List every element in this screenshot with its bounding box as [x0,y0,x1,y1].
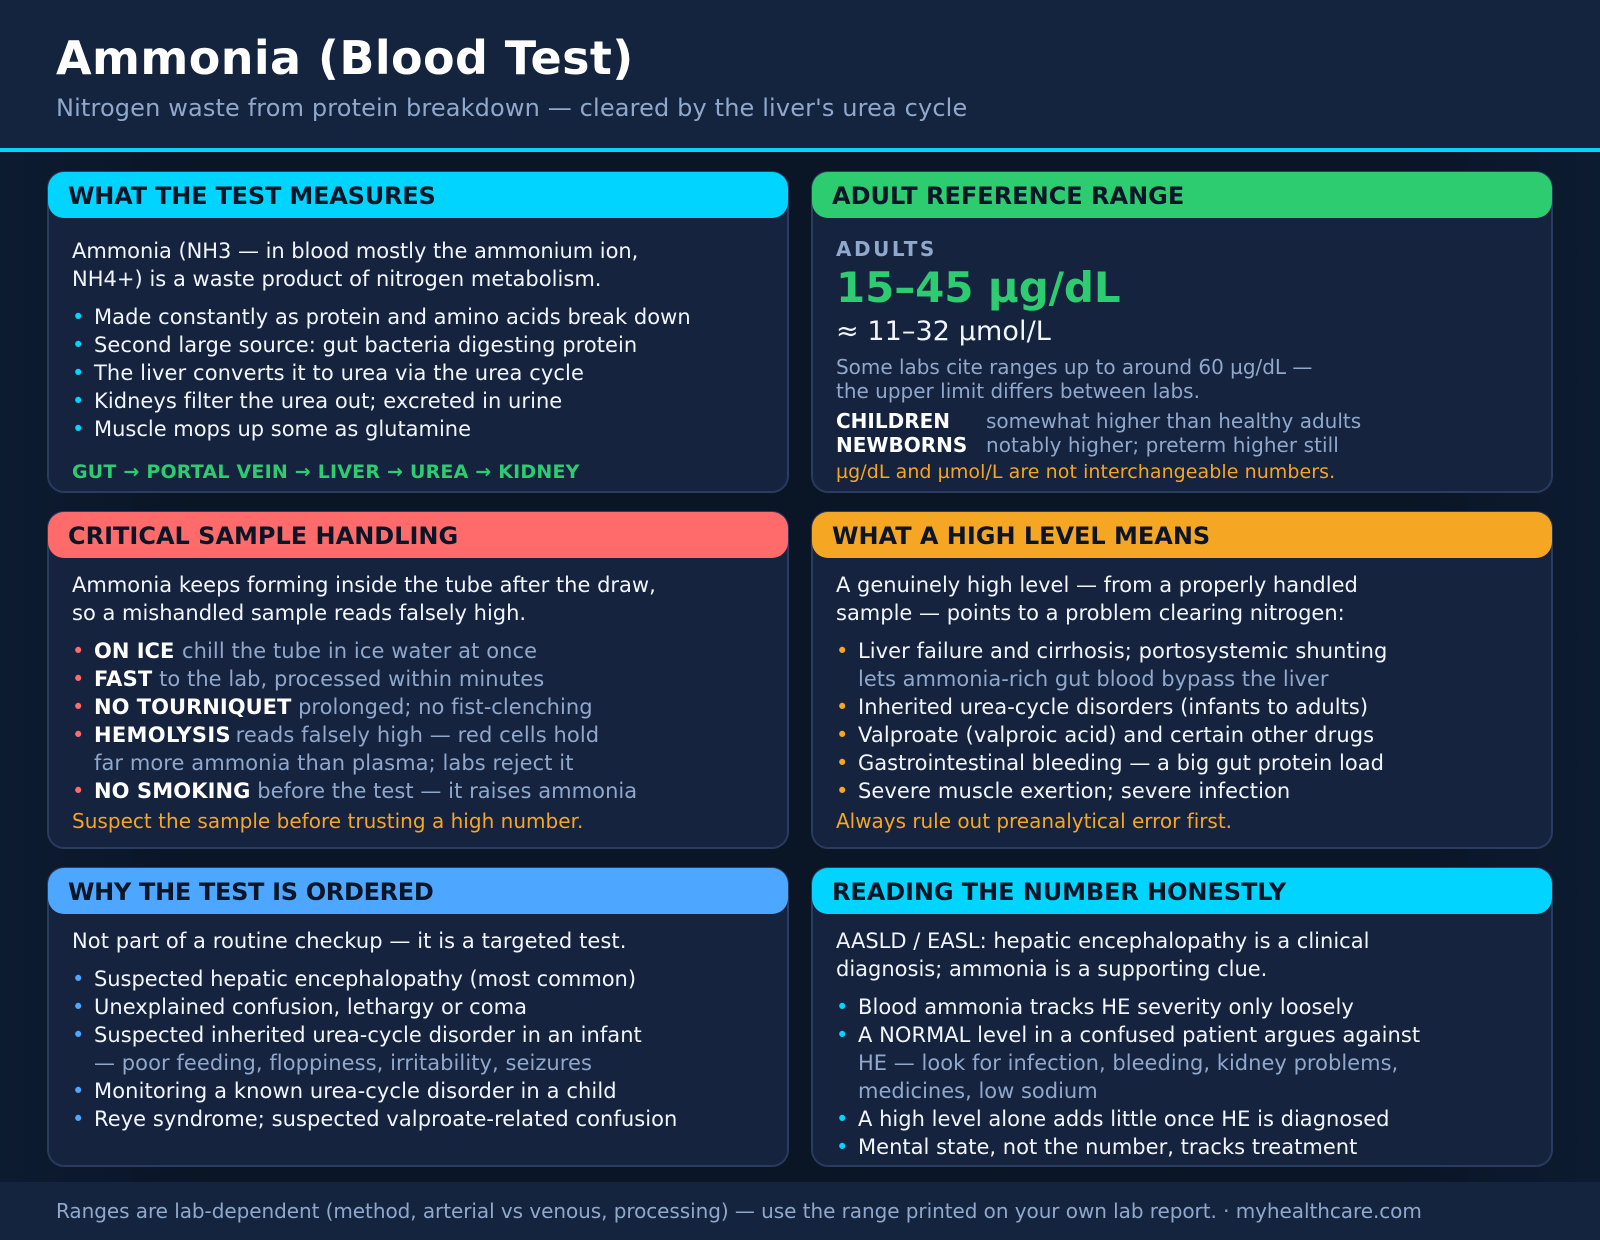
handling list: • [72,639,84,663]
interpretation list: A NORMAL level in a confused patient argues against [858,1023,1420,1047]
children row: somewhat higher than healthy adults [986,409,1361,433]
handling list: far more ammonia than plasma; labs reject it [94,751,574,775]
reasons list: • [72,995,84,1019]
bullet list: Kidneys filter the urea out; excreted in urine [94,389,562,413]
interpretation list: • [836,995,848,1019]
intro text: Ammonia (NH3 — in blood mostly the ammonium ion, [72,239,638,263]
intro text: Ammonia keeps forming inside the tube after the draw, [72,573,656,597]
intro text [836,573,1358,625]
causes list: Inherited urea-cycle disorders (infants to adults) [858,695,1368,719]
bullet list [72,305,691,441]
heading: reading the number honestly [812,868,1552,914]
handling list: NO TOURNIQUET prolonged; no fist-clenching [94,695,593,719]
heading: why the test is ordered [48,868,788,914]
heading: what the test measures: WHAT THE TEST MEASURES [68,182,436,210]
reasons list: • [72,1079,84,1103]
interpretation list: • [836,1135,848,1159]
causes list [836,639,1387,803]
adult range value: 15–45 µg/dL [836,263,1121,312]
handling list: HEMOLYSIS reads falsely high — red cells hold [94,723,599,747]
footer: Ranges are lab-dependent (method, arterial vs venous, processing) — use the range printed on your own lab report. · myhealthcare.com [56,1199,1422,1223]
children row: CHILDREN [836,409,950,433]
causes list: Liver failure and cirrhosis; portosystemic shunting [858,639,1387,663]
bullet list: • [72,389,84,413]
bullet list: Muscle mops up some as glutamine [94,417,471,441]
reasons list: • [72,967,84,991]
footer [0,1182,1600,1240]
bullet list: Made constantly as protein and amino acids break down [94,305,691,329]
intro text [72,239,638,291]
handling list: • [72,779,84,803]
intro text [72,573,656,625]
interpretation list: Blood ammonia tracks HE severity only loosely [858,995,1354,1019]
reasons list: Suspected hepatic encephalopathy (most common) [94,967,636,991]
subtitle: Nitrogen waste from protein breakdown — cleared by the liver's urea cycle [56,94,967,122]
header banner [0,0,1600,152]
interpretation list: medicines, low sodium [858,1079,1098,1103]
warning note: Suspect the sample before trusting a high number. [72,809,583,833]
panel: critical sample handling [48,512,788,848]
heading: adult reference range [812,172,1552,218]
reasons list: • [72,1023,84,1047]
interpretation list: HE — look for infection, bleeding, kidney problems, [858,1051,1398,1075]
lab note: the upper limit differs between labs. [836,379,1200,403]
causes list: • [836,639,848,663]
bullet list: Second large source: gut bacteria digesting protein [94,333,637,357]
reasons list: Suspected inherited urea-cycle disorder in an infant [94,1023,642,1047]
handling list: • [72,667,84,691]
bullet list: • [72,361,84,385]
reasons list: Unexplained confusion, lethargy or coma [94,995,527,1019]
intro text: Not part of a routine checkup — it is a targeted test. [72,929,626,953]
heading: critical sample handling: CRITICAL SAMPLE HANDLING [68,522,458,550]
interpretation list [836,995,1420,1159]
intro text: A genuinely high level — from a properly handled [836,573,1358,597]
reasons list: Monitoring a known urea-cycle disorder in a child [94,1079,617,1103]
panel: reading the number honestly [812,868,1552,1166]
lab note: Some labs cite ranges up to around 60 µg/dL — [836,355,1312,379]
bullet list: • [72,333,84,357]
handling list: ON ICE chill the tube in ice water at once [94,639,537,663]
bullet list: • [72,305,84,329]
heading: adult reference range: ADULT REFERENCE RANGE [832,182,1184,210]
handling list [72,639,637,803]
causes list: lets ammonia-rich gut blood bypass the liver [858,667,1329,691]
heading: what a high level means [812,512,1552,558]
adults label: ADULTS [836,237,937,261]
heading: what a high level means: WHAT A HIGH LEVEL MEANS [832,522,1210,550]
intro text: AASLD / EASL: hepatic encephalopathy is a clinical [836,929,1369,953]
pathway flow: GUT → PORTAL VEIN → LIVER → UREA → KIDNEY [72,461,580,483]
reasons list: • [72,1107,84,1131]
intro text: so a mishandled sample reads falsely high. [72,601,526,625]
causes list: Gastrointestinal bleeding — a big gut protein load [858,751,1384,775]
panel: adult reference range [812,172,1552,492]
intro text: diagnosis; ammonia is a supporting clue. [836,957,1267,981]
heading: critical sample handling [48,512,788,558]
causes list: • [836,751,848,775]
intro text: sample — points to a problem clearing nitrogen: [836,601,1345,625]
interpretation list: • [836,1023,848,1047]
causes list: Severe muscle exertion; severe infection [858,779,1290,803]
newborns row: notably higher; preterm higher still [986,433,1339,457]
reasons list: Reye syndrome; suspected valproate-related confusion [94,1107,677,1131]
bullet list: The liver converts it to urea via the urea cycle [94,361,584,385]
title: Ammonia (Blood Test) [56,31,634,85]
lab note [836,355,1312,403]
unit warning: µg/dL and µmol/L are not interchangeable numbers. [836,461,1335,483]
reasons list [72,967,677,1131]
interpretation list: Mental state, not the number, tracks treatment [858,1135,1357,1159]
handling list: • [72,723,84,747]
newborns row: NEWBORNS [836,433,967,457]
heading: why the test is ordered: WHY THE TEST IS ORDERED [68,878,433,906]
causes list: • [836,723,848,747]
handling list: • [72,695,84,719]
intro text [836,929,1369,981]
panel: what the test measures [48,172,788,492]
heading: reading the number honestly: READING THE NUMBER HONESTLY [832,878,1286,906]
causes list: • [836,695,848,719]
causes list: Valproate (valproic acid) and certain other drugs [858,723,1374,747]
SI unit value: ≈ 11–32 µmol/L [836,316,1051,347]
bullet list: • [72,417,84,441]
warning note: Always rule out preanalytical error first. [836,809,1232,833]
handling list: NO SMOKING before the test — it raises ammonia [94,779,637,803]
panel: what a high level means [812,512,1552,848]
interpretation list: • [836,1107,848,1131]
intro text: NH4+) is a waste product of nitrogen metabolism. [72,267,602,291]
reasons list: — poor feeding, floppiness, irritability, seizures [94,1051,592,1075]
interpretation list: A high level alone adds little once HE is diagnosed [858,1107,1390,1131]
handling list: FAST to the lab, processed within minutes [94,667,544,691]
heading: what the test measures [48,172,788,218]
causes list: • [836,779,848,803]
panel: why the test is ordered [48,868,788,1166]
